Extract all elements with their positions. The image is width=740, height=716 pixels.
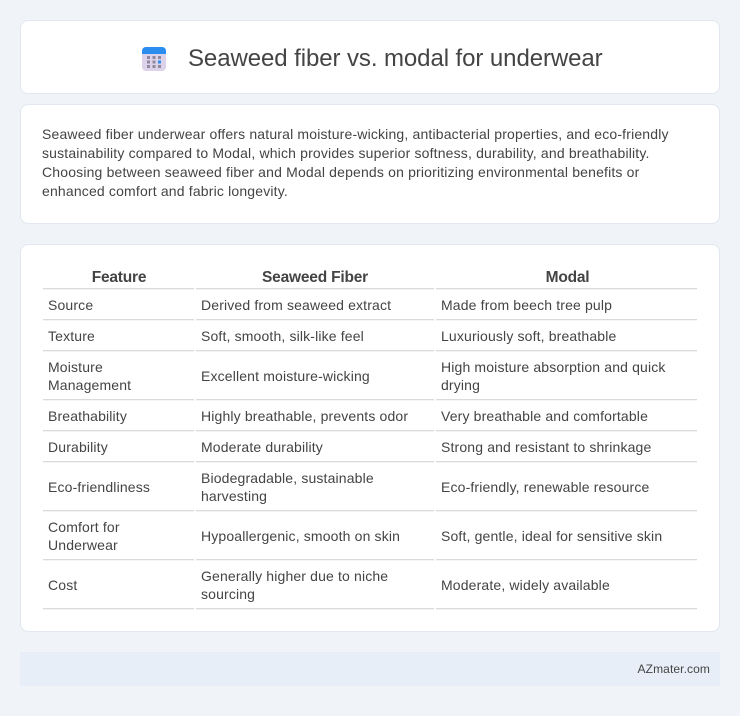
summary text: Choosing between seaweed fiber and Modal depends on prioritizing environmental benefits or (42, 164, 639, 180)
comparison table: Derived from seaweed extract (201, 297, 391, 313)
summary card (20, 104, 720, 224)
comparison table: Strong and resistant to shrinkage (441, 439, 651, 455)
comparison table: Very breathable and comfortable (441, 408, 648, 424)
row: durability: Durability (48, 439, 108, 455)
comparison table (43, 269, 697, 610)
comparison table: Eco-friendly, renewable resource (441, 479, 649, 495)
comparison table: Soft, gentle, ideal for sensitive skin (441, 528, 662, 544)
header: modal: Modal (546, 269, 589, 286)
row: comfort for underwear: Underwear (48, 537, 118, 553)
comparison table: drying (441, 377, 480, 393)
comparison table: Moderate durability (201, 439, 323, 455)
row: source: Source (48, 297, 93, 313)
title: Seaweed fiber vs. modal for underwear (188, 45, 603, 72)
footer bar (20, 652, 720, 686)
footer credit: AZmater.com (638, 662, 710, 676)
icon: calendar (142, 47, 166, 71)
row: cost: Cost (48, 577, 77, 593)
comparison table: Highly breathable, prevents odor (201, 408, 408, 424)
summary text: sustainability compared to Modal, which provides superior softness, durability, and breathability. (42, 145, 650, 161)
comparison table: Generally higher due to niche (201, 568, 388, 584)
header: seaweed fiber: Seaweed Fiber (262, 269, 368, 286)
summary text: Seaweed fiber underwear offers natural moisture-wicking, antibacterial properties, and eco-friendly (42, 126, 669, 142)
comparison table: Moderate, widely available (441, 577, 610, 593)
comparison table card (20, 244, 720, 632)
comparison table: Luxuriously soft, breathable (441, 328, 616, 344)
comparison table: High moisture absorption and quick (441, 359, 666, 375)
comparison table: Soft, smooth, silk-like feel (201, 328, 364, 344)
comparison table: sourcing (201, 586, 255, 602)
summary text: enhanced comfort and fabric longevity. (42, 183, 288, 199)
comparison table: Hypoallergenic, smooth on skin (201, 528, 400, 544)
row: moisture management: Moisture (48, 359, 103, 375)
row: breathability: Breathability (48, 408, 127, 424)
comparison table: harvesting (201, 488, 267, 504)
comparison table: Excellent moisture-wicking (201, 368, 370, 384)
comparison table: Made from beech tree pulp (441, 297, 612, 313)
title card (20, 20, 720, 94)
row: moisture management: Management (48, 377, 131, 393)
comparison table: Biodegradable, sustainable (201, 470, 374, 486)
row: eco-friendliness: Eco-friendliness (48, 479, 150, 495)
summary text (42, 126, 669, 199)
row: comfort for underwear: Comfort for (48, 519, 120, 535)
header: feature: Feature (92, 269, 146, 286)
row: texture: Texture (48, 328, 95, 344)
row: comfort for underwear (48, 519, 120, 553)
row: moisture management (48, 359, 131, 393)
